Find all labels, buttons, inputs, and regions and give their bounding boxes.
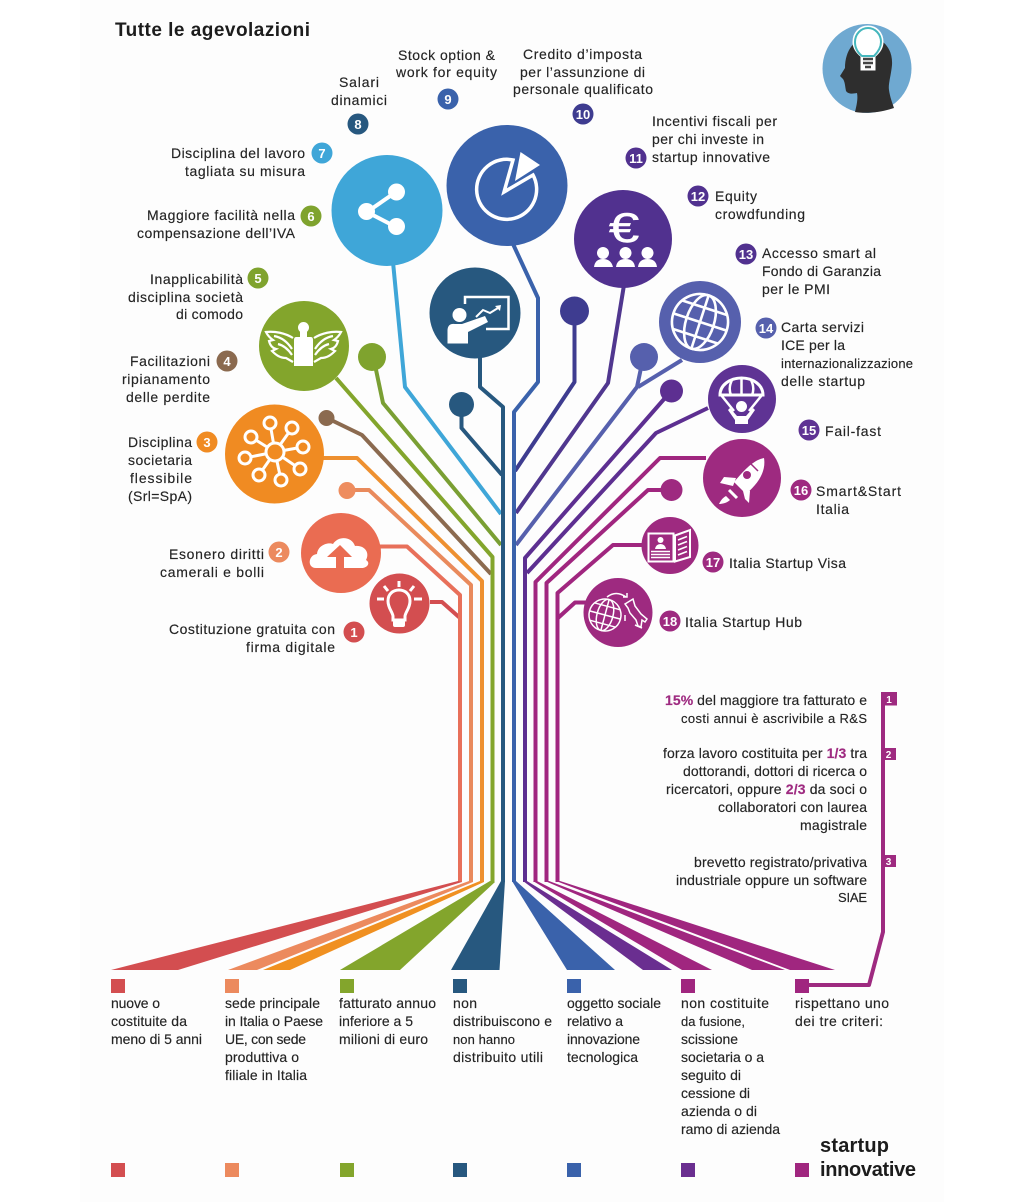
label: Maggiore facilità: Maggiore facilità nella xyxy=(147,207,295,223)
badge 12: 12 xyxy=(691,189,705,204)
label: Smart&Start xyxy=(816,483,901,517)
label: Equity crowdfunding: Equity xyxy=(715,188,757,204)
branch: green dot xyxy=(358,343,501,545)
criterion 3 text xyxy=(676,854,867,905)
label: Credito d'imposta: personale qualificato xyxy=(513,81,653,97)
branch: Italy globe circle xyxy=(558,578,652,647)
criteria tab 1: 1 xyxy=(886,695,892,706)
label: Salari dinamici: Salari xyxy=(339,74,379,90)
icon: presentation xyxy=(448,297,508,344)
badge 6 xyxy=(300,206,322,226)
branch: bulb circle xyxy=(370,574,460,634)
label: Salari dinamici: dinamici xyxy=(331,92,387,108)
criterion 2 text: forza lavoro costituita per 1/3 tra xyxy=(663,745,867,761)
badge 15 xyxy=(798,420,820,440)
label: Credito d'imposta: per l’assunzione di xyxy=(520,64,645,80)
requirement 5 xyxy=(567,979,661,1065)
requirement 7 xyxy=(795,979,889,1029)
requirement 2 xyxy=(225,979,323,1083)
label: Equity crowdfunding xyxy=(715,188,805,222)
label: Costituzione gratuita xyxy=(169,621,335,655)
branch: magenta dot xyxy=(546,479,682,882)
branch: small salmon dot xyxy=(338,482,471,882)
icon: light bulb xyxy=(377,581,422,627)
branch: share circle xyxy=(332,155,501,514)
branch: visa booklet circle xyxy=(558,517,698,882)
icon: head with light bulb xyxy=(822,24,912,113)
label: Incentivi fiscali: per chi investe in xyxy=(652,131,764,147)
criterion 2 text: ricercatori, oppure 2/3 da soci o xyxy=(666,781,867,797)
label: Facilitazioni xyxy=(122,353,210,405)
criteria tab 2 xyxy=(881,748,896,761)
badge 8 xyxy=(348,114,368,134)
band: purple xyxy=(523,881,672,970)
label: Inapplicabilità xyxy=(128,271,243,322)
label: Inapplicabilità: di comodo xyxy=(176,306,243,322)
requirement 6: societaria o a xyxy=(681,1049,764,1065)
criterion 1 text: costi annui è ascrivibile a R&S xyxy=(681,711,867,726)
label: Carta servizi ICE: delle startup xyxy=(781,373,865,389)
requirement 5: oggetto sociale xyxy=(567,995,661,1011)
label: Costituzione gratuita: firma digitale xyxy=(246,639,335,655)
badge 9: 9 xyxy=(444,92,452,107)
icon: euro and people xyxy=(594,205,657,267)
label: Italia Startup Visa: Italia Startup Visa xyxy=(729,555,846,571)
label: Italia Startup Hub: Italia Startup Hub xyxy=(685,614,802,630)
icon: share xyxy=(358,184,405,235)
label: Esonero diritti xyxy=(160,546,264,580)
legend squares xyxy=(111,1163,809,1177)
branch: cloud circle xyxy=(301,513,460,882)
icon: pie chart xyxy=(477,152,540,219)
criterion 3 text: brevetto registrato/privativa xyxy=(694,854,867,870)
badge 4 xyxy=(216,350,238,372)
band: magenta 1 xyxy=(533,881,712,970)
requirement 2: produttiva o xyxy=(225,1049,299,1065)
requirement 7: rispettano uno xyxy=(795,995,889,1011)
label: Accesso smart: Accesso smart al xyxy=(762,245,876,261)
badge 13 xyxy=(736,244,756,264)
label: Accesso smart: Fondo di Garanzia xyxy=(762,263,881,279)
criteria tab 1 xyxy=(881,692,897,706)
label: Disciplina del lavoro: tagliata su misura xyxy=(185,163,305,179)
criterion 2 text: collaboratori con laurea xyxy=(718,799,867,815)
label: Esonero diritti: Esonero diritti xyxy=(169,546,264,562)
band: magenta 3 xyxy=(556,881,835,970)
label: Smart&Start: Italia xyxy=(816,501,849,517)
badge 17: 17 xyxy=(706,555,720,570)
badge 4: 4 xyxy=(223,354,231,369)
badge 2: 2 xyxy=(275,545,283,560)
branch: network circle xyxy=(225,404,482,882)
requirement 1: meno di 5 anni xyxy=(111,1031,202,1047)
band: orange xyxy=(263,881,484,970)
icon: winged bottle xyxy=(266,322,341,366)
icon: globe xyxy=(665,287,735,357)
badge 5: 5 xyxy=(254,271,262,286)
legend title: startup innovative xyxy=(820,1135,916,1181)
label: Equity crowdfunding: crowdfunding xyxy=(715,206,805,222)
label: Inapplicabilità: disciplina società xyxy=(128,289,243,305)
branch: euro circle xyxy=(516,190,672,513)
branch: presentation circle xyxy=(430,268,520,882)
label: Facilitazioni: ripianamento xyxy=(122,371,210,387)
label: Disciplina del lavoro: Disciplina del lavoro xyxy=(171,145,305,161)
requirement 3: milioni di euro xyxy=(339,1031,428,1047)
criterion 3 text: SIAE xyxy=(838,890,867,905)
label: Esonero diritti: camerali e bolli xyxy=(160,564,264,580)
branch: rocket circle xyxy=(536,439,781,882)
label: Maggiore facilità: compensazione dell’IVA xyxy=(137,225,296,241)
branch: purple dot xyxy=(525,380,683,882)
badge 16 xyxy=(790,480,812,500)
badge 9 xyxy=(438,88,458,110)
branch: periwinkle dot and globe circle xyxy=(516,281,741,545)
icon: euro and people: € xyxy=(609,205,639,251)
requirement 5: tecnologica xyxy=(567,1049,638,1065)
criterion 2 text: magistrale xyxy=(800,817,867,833)
fan bands leading to the criteria xyxy=(111,881,835,970)
band: green xyxy=(340,881,495,970)
badge 3: 3 xyxy=(203,435,211,450)
requirement 6: non costituite xyxy=(681,995,769,1011)
requirement 2: filiale in Italia xyxy=(225,1067,307,1083)
branch: indigo dot xyxy=(515,296,589,471)
requirement 2: sede principale xyxy=(225,995,320,1011)
requirement 4: non hanno xyxy=(453,1032,515,1047)
label: Disciplina societaria xyxy=(128,434,192,504)
label: Maggiore facilità xyxy=(137,207,296,241)
label: Incentivi fiscali xyxy=(652,113,777,165)
requirement 4: distribuiscono e xyxy=(453,1013,552,1029)
badge 15: 15 xyxy=(802,423,816,438)
badge 16: 16 xyxy=(794,483,808,498)
requirement 2: in Italia o Paese xyxy=(225,1013,323,1029)
badge 10: 10 xyxy=(576,107,590,122)
icon: globe and Italy xyxy=(585,593,647,635)
badge 14: 14 xyxy=(759,321,774,336)
requirement 6: azienda o di xyxy=(681,1103,757,1119)
badge 5 xyxy=(248,268,268,288)
criterion 1 text: 15% del maggiore tra fatturato e xyxy=(665,692,867,708)
legend title: startup innovative: startup xyxy=(820,1135,889,1157)
branch: large blue pie circle xyxy=(446,125,568,882)
title: Tutte le agevolazioni xyxy=(115,20,310,41)
label: Carta servizi ICE: ICE per la xyxy=(781,337,845,353)
branch: navy dot xyxy=(449,392,502,475)
label: Inapplicabilità: Inapplicabilità xyxy=(150,271,243,287)
branch: wings circle xyxy=(259,301,492,882)
label: Carta servizi ICE: Carta servizi xyxy=(781,319,864,335)
requirement 2: UE, con sede xyxy=(225,1031,306,1047)
label: Credito d'imposta: Credito d’imposta xyxy=(523,46,642,62)
band: navy xyxy=(451,881,505,970)
legend title: startup innovative: innovative xyxy=(820,1159,916,1181)
criterion 3 text: industriale oppure un software xyxy=(676,872,867,888)
icon: parachute xyxy=(720,378,763,424)
badge 13: 13 xyxy=(739,247,753,262)
badge 12 xyxy=(688,186,708,206)
label: Incentivi fiscali: startup innovative xyxy=(652,149,770,165)
criterion 2 text xyxy=(663,745,867,833)
badge 3 xyxy=(196,432,218,452)
label: Costituzione gratuita: Costituzione gratuita con xyxy=(169,621,335,637)
label: Smart&Start: Smart&Start xyxy=(816,483,901,499)
label: Disciplina societaria: Disciplina xyxy=(128,434,192,450)
requirement 3 xyxy=(339,979,436,1047)
criteria tab 3: 3 xyxy=(886,857,892,868)
requirement 6: scissione xyxy=(681,1031,738,1047)
requirement 6: da fusione, xyxy=(681,1014,745,1029)
criteria tab 3 xyxy=(881,855,896,868)
badge 10 xyxy=(572,104,594,124)
criteria tab 2: 2 xyxy=(886,750,892,761)
requirement 5: innovazione xyxy=(567,1031,640,1047)
label: Accesso smart: per le PMI xyxy=(762,281,830,297)
label: Carta servizi ICE xyxy=(781,319,913,389)
badge 18: 18 xyxy=(663,614,677,629)
badge 7 xyxy=(312,142,332,164)
requirement 4: distribuito utili xyxy=(453,1049,543,1065)
icon: network xyxy=(239,417,309,486)
criterion 1 text xyxy=(665,692,867,726)
label: Disciplina societaria: flessibile xyxy=(130,470,192,486)
requirement 6: cessione di xyxy=(681,1085,750,1101)
requirement 3: inferiore a 5 xyxy=(339,1013,413,1029)
badge 11: 11 xyxy=(629,151,643,166)
requirement 4: non xyxy=(453,995,477,1011)
label: Stock option: work for equity xyxy=(395,64,497,80)
requirement 4 xyxy=(453,979,552,1065)
badge 1: 1 xyxy=(350,625,358,640)
label: Disciplina del lavoro xyxy=(171,145,305,179)
requirement 6: seguito di xyxy=(681,1067,741,1083)
label: Facilitazioni: Facilitazioni xyxy=(130,353,210,369)
band: blue xyxy=(512,881,615,970)
badge 1 xyxy=(344,622,364,642)
label: Disciplina societaria: (Srl=SpA) xyxy=(128,488,192,504)
connector to the three criteria xyxy=(805,692,883,985)
requirement 3: fatturato annuo xyxy=(339,995,436,1011)
requirement 1: costituite da xyxy=(111,1013,187,1029)
band: red xyxy=(111,881,462,970)
band: magenta 2 xyxy=(545,881,785,970)
branch: brown dot xyxy=(318,410,491,574)
badge 6: 6 xyxy=(307,209,315,224)
label: Disciplina societaria: societaria xyxy=(128,452,192,468)
badge 7: 7 xyxy=(318,146,326,161)
badge 14 xyxy=(756,318,776,338)
badge 17 xyxy=(702,552,724,572)
criterion 2 text: dottorandi, dottori di ricerca o xyxy=(683,763,867,779)
badge 8: 8 xyxy=(354,117,362,132)
requirement 1 xyxy=(111,979,202,1047)
label: Accesso smart xyxy=(762,245,881,297)
label: Incentivi fiscali: Incentivi fiscali per xyxy=(652,113,777,129)
label: Stock option: Stock option & xyxy=(398,47,496,63)
branch: parachute circle xyxy=(527,365,776,573)
requirement 5: relativo a xyxy=(567,1013,623,1029)
label: Credito d'imposta xyxy=(513,46,653,97)
icon: rocket xyxy=(719,458,764,504)
icon: open passport xyxy=(648,530,690,562)
requirement 6 xyxy=(681,979,780,1137)
label: Stock option xyxy=(395,47,497,80)
requirement 7: dei tre criteri: xyxy=(795,1013,883,1029)
icon: cloud upload xyxy=(310,538,368,569)
badge 18 xyxy=(660,610,680,632)
label: Salari dinamici xyxy=(331,74,387,108)
requirement 1: nuove o xyxy=(111,995,160,1011)
band: salmon xyxy=(228,881,473,970)
requirement 6: ramo di azienda xyxy=(681,1121,780,1137)
label: Facilitazioni: delle perdite xyxy=(126,389,210,405)
badge 11 xyxy=(626,148,646,168)
badge 2 xyxy=(268,542,290,562)
label: Fail-fast: Fail-fast xyxy=(825,423,881,439)
label: Carta servizi ICE: internazionalizzazione xyxy=(781,356,913,371)
